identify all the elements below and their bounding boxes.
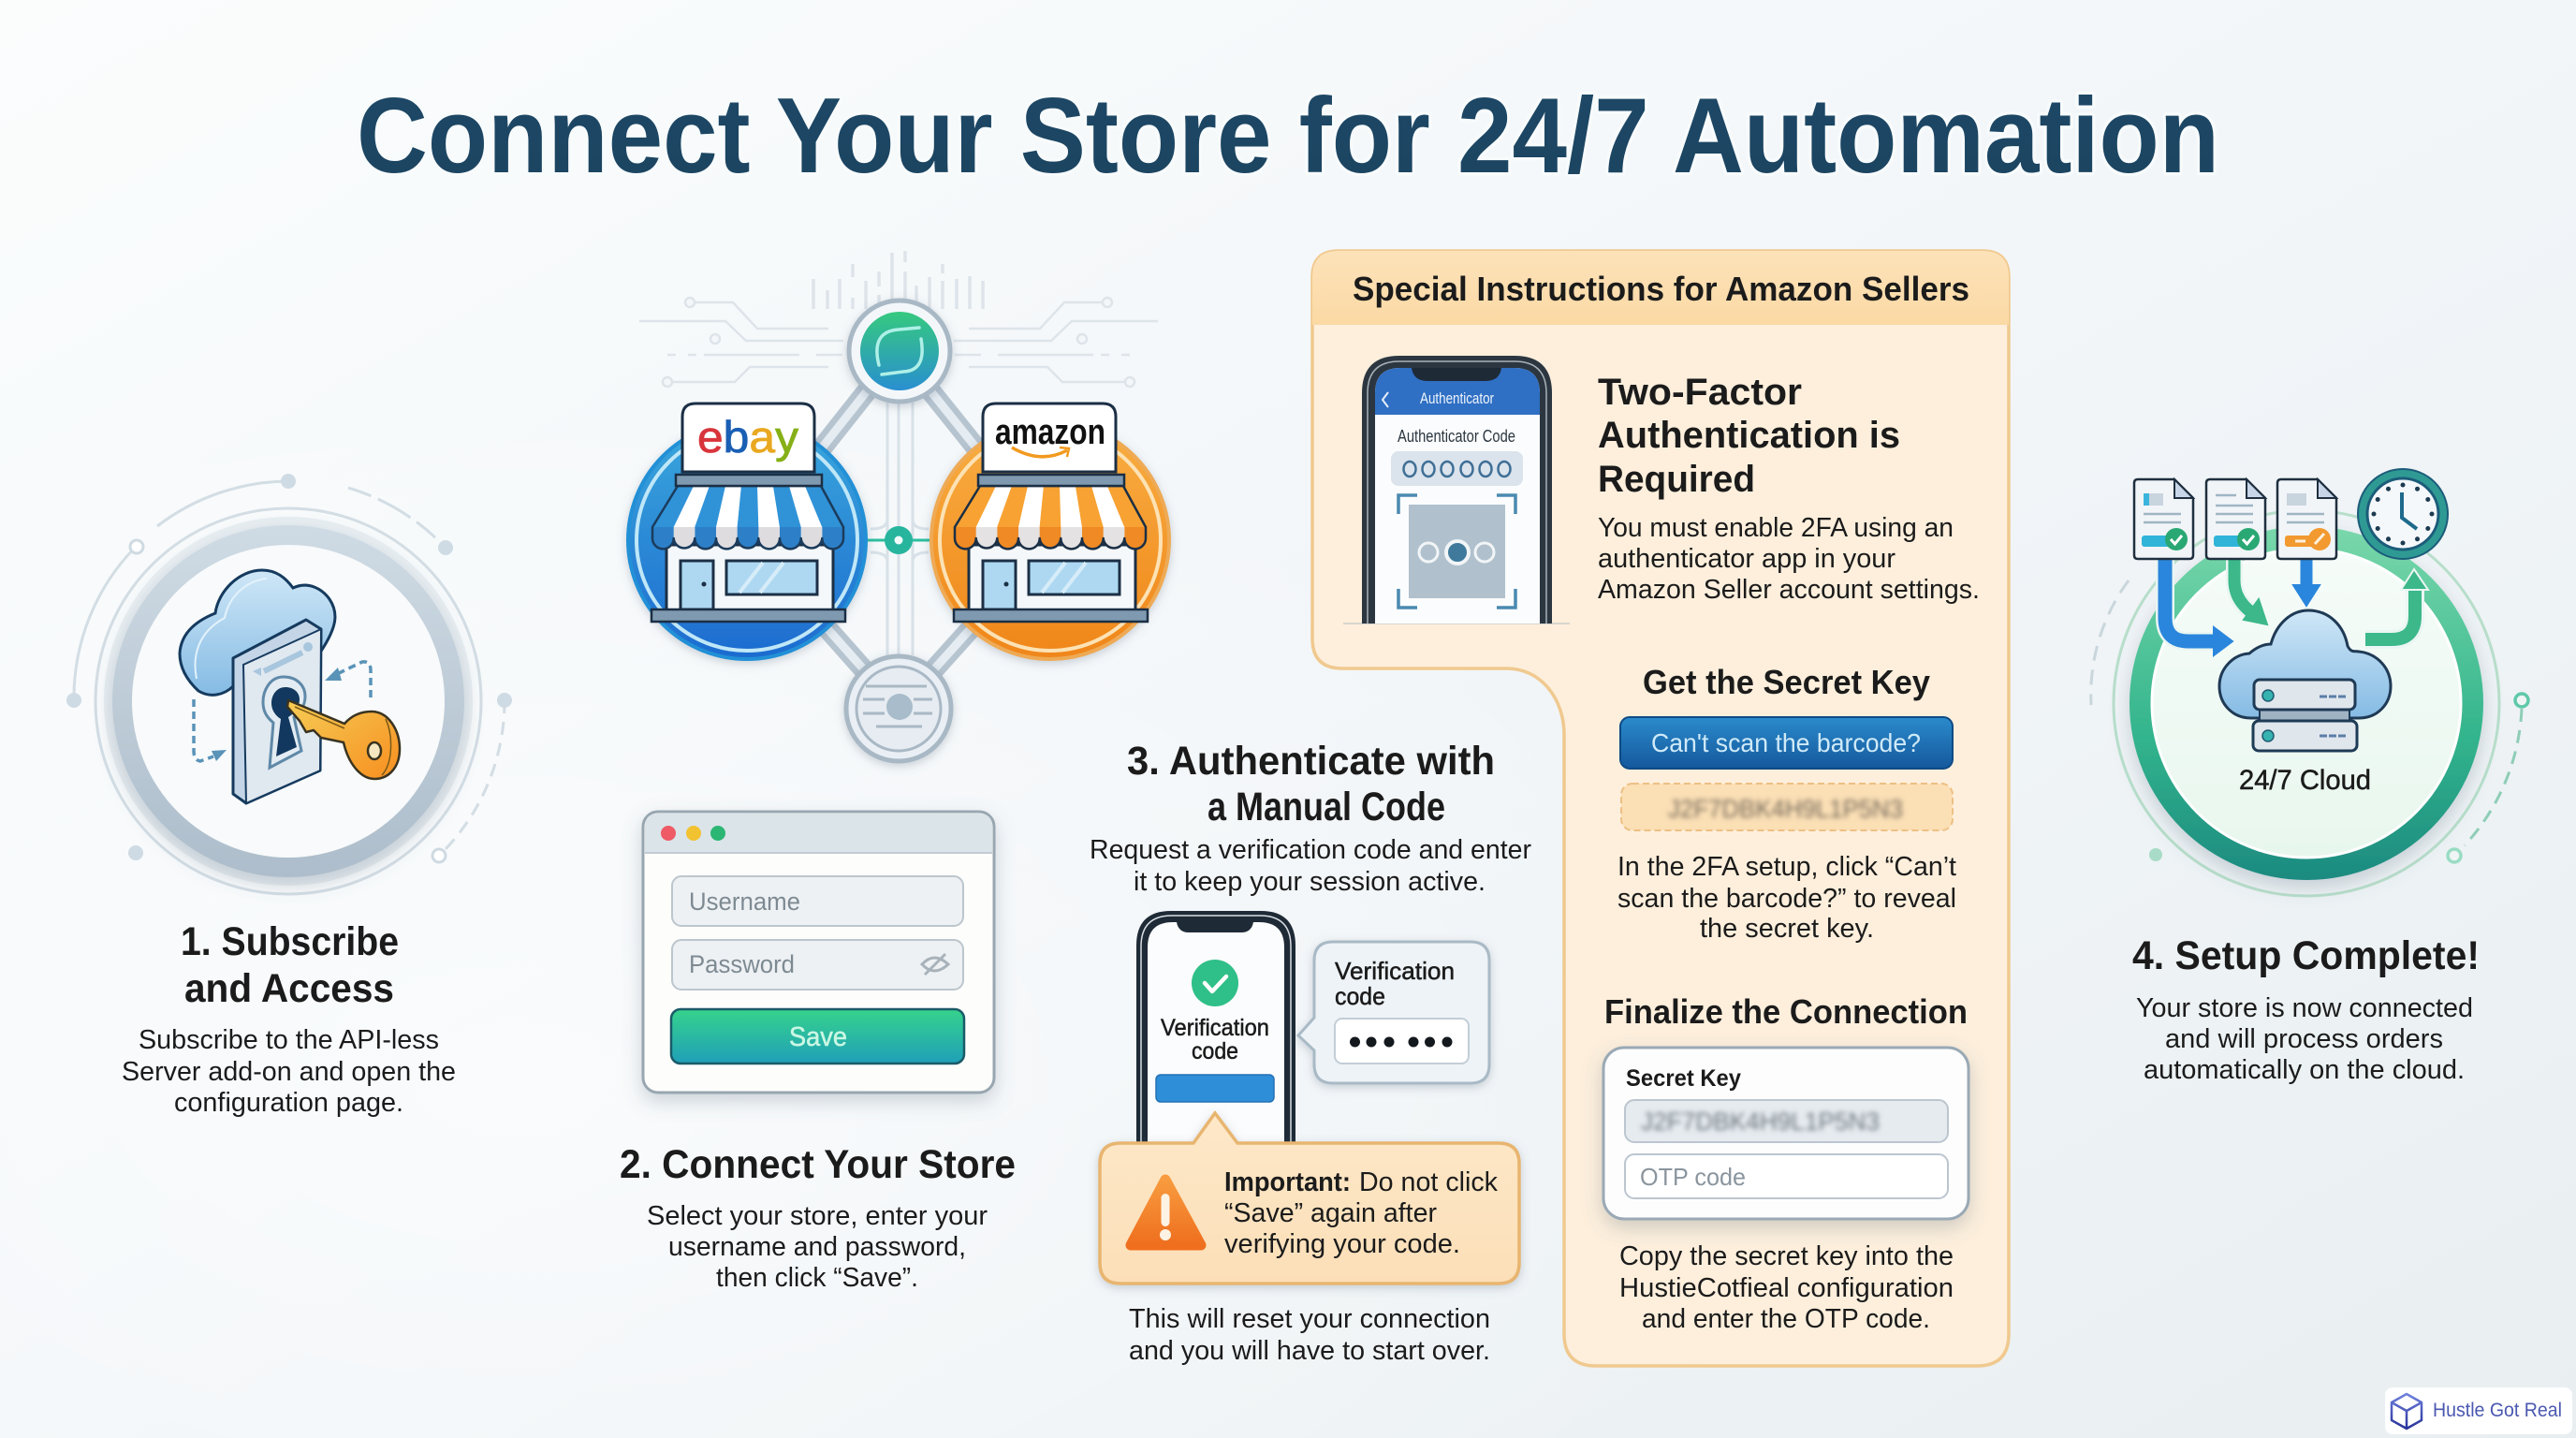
- save button: [671, 1009, 964, 1064]
- icon: circuit traces: [639, 251, 1158, 387]
- icon: blue ebay store: [628, 404, 866, 659]
- text: two-factor body: authenticator app in your: [1598, 544, 1895, 574]
- document one: [2134, 479, 2193, 559]
- arrows: flow to and from cloud: [2165, 560, 2428, 655]
- heading: finalize the connection: Finalize the Connection: [1604, 992, 1968, 1031]
- heading: step 3: 3. Authenticate with: [1127, 739, 1495, 784]
- text: step 4 body: Your store is now connected: [2136, 993, 2473, 1023]
- icon: diamond connectors: [749, 351, 1050, 709]
- icon: phone with verification code: code: [1192, 1038, 1238, 1064]
- icon: decorative orbit rings: [66, 474, 512, 894]
- callout: important warning: Important:: [1224, 1167, 1351, 1197]
- text: secret key body: scan the barcode?” to reveal: [1617, 884, 1956, 914]
- text: warning consequence: [1129, 1304, 1490, 1366]
- panel: step 4 setup complete: [2091, 469, 2528, 1085]
- heading: step 4: 4. Setup Complete!: [2132, 933, 2480, 978]
- card: secret key form: OTP code: [1640, 1163, 1746, 1191]
- icon: cloud with servers: [2219, 610, 2391, 751]
- icon: cloud with keyhole and key: [180, 570, 400, 803]
- icon: phone with verification code: Verification: [1161, 1015, 1269, 1041]
- text: step 4 body: and will process orders: [2165, 1024, 2443, 1054]
- heading: step 3: [1127, 739, 1495, 829]
- icon: sync node: [849, 301, 950, 402]
- heading: two-factor authentication: Authentication is: [1598, 415, 1900, 456]
- text: step 4 body: automatically on the cloud.: [2144, 1055, 2465, 1085]
- username field: Username: [689, 888, 800, 916]
- callout: important warning: [1100, 1113, 1519, 1284]
- text: step 2 body: Select your store, enter your: [647, 1201, 988, 1231]
- text: step 1 body: Server add-on and open the: [122, 1057, 456, 1087]
- text: step 2 body: [647, 1201, 988, 1293]
- document two: [2206, 479, 2265, 559]
- icon: authenticator phone: Authenticator: [1420, 389, 1494, 407]
- icon: authenticator phone: [1343, 356, 1570, 624]
- text: step 3 body: Request a verification code and enter: [1090, 835, 1531, 865]
- text: secret key body: [1617, 852, 1956, 944]
- card: secret key form: [1603, 1048, 1969, 1219]
- panel: step 3 authenticate with a manual code: [1090, 739, 1531, 1366]
- logo badge: hustle got real: [2385, 1387, 2572, 1434]
- icon: blue ebay store: ebay: [697, 412, 799, 462]
- icon: orange amazon store: [931, 404, 1169, 659]
- text: finalize body: Copy the secret key into the: [1619, 1241, 1954, 1271]
- icon: warning triangle: [1131, 1180, 1201, 1245]
- icon: phone with verification code: [1136, 911, 1295, 1146]
- icon: decorative orbit: [2091, 510, 2528, 896]
- card: secret key form: J2F7DBK4H9L1P5N3: [1641, 1108, 1880, 1136]
- text: warning consequence: and you will have to start over.: [1129, 1336, 1490, 1366]
- panel: step 1 subscribe and access: [66, 474, 512, 1118]
- logo badge: hustle got real: Hustle Got Real: [2433, 1400, 2562, 1421]
- card: secret key form: Secret Key: [1626, 1065, 1741, 1092]
- heading: step 1: [181, 919, 399, 1011]
- icon: server node: [846, 656, 951, 761]
- icon: grey ring disc: [104, 517, 473, 886]
- button: can't scan the barcode: [1620, 717, 1953, 769]
- text: two-factor body: [1598, 513, 1980, 605]
- panel: special instructions for amazon sellers: [1312, 251, 2009, 1366]
- text: step 2 body: then click “Save”.: [716, 1263, 918, 1293]
- text: two-factor body: Amazon Seller account settings.: [1598, 575, 1980, 605]
- heading: two-factor authentication: Two-Factor: [1598, 372, 1802, 413]
- username field: [672, 876, 963, 926]
- text: secret key body: In the 2FA setup, click “Can’t: [1617, 852, 1956, 882]
- secret key box: [1621, 784, 1953, 830]
- text: secret key body: the secret key.: [1700, 914, 1874, 944]
- heading: two-factor authentication: Required: [1598, 459, 1755, 500]
- icon: authenticator phone: Authenticator Code: [1398, 427, 1515, 446]
- callout: important warning: “Save” again after: [1224, 1198, 1437, 1228]
- icon: clock: [2358, 469, 2448, 559]
- text: step 3 body: it to keep your session active.: [1134, 867, 1486, 897]
- password field: [672, 940, 963, 990]
- text: finalize body: HustieCotfieal configuration: [1619, 1273, 1954, 1303]
- text: finalize body: and enter the OTP code.: [1642, 1304, 1930, 1334]
- text: warning consequence: This will reset your connection: [1129, 1304, 1490, 1334]
- text: step 3 body: [1090, 835, 1531, 897]
- heading: step 3: a Manual Code: [1208, 785, 1445, 829]
- callout: verification code bubble: code: [1335, 982, 1385, 1010]
- icon: documents: [2134, 479, 2336, 559]
- heading: step 1: 1. Subscribe: [181, 919, 399, 964]
- icon: cube: [2392, 1394, 2422, 1429]
- panel header: Special Instructions for Amazon Sellers: [1353, 270, 1969, 308]
- icon: orange amazon store: amazon: [995, 413, 1105, 452]
- panel: step 2 connect your store: [620, 251, 1169, 1293]
- document three: [2277, 479, 2336, 559]
- label: 24/7 cloud: 24/7 Cloud: [2239, 765, 2371, 796]
- heading: two-factor authentication: [1598, 372, 1900, 500]
- icon: center node: [885, 526, 913, 554]
- title: Connect Your Store for 24/7 Automation: [357, 77, 2219, 196]
- callout: important warning: verifying your code.: [1224, 1229, 1460, 1259]
- text: step 1 body: configuration page.: [174, 1088, 403, 1118]
- text: step 1 body: Subscribe to the API-less: [139, 1025, 439, 1055]
- callout: verification code bubble: Verification: [1335, 957, 1455, 985]
- heading: get the secret key: Get the Secret Key: [1643, 663, 1930, 701]
- text: finalize body: [1619, 1241, 1954, 1334]
- secret key box: J2F7DBK4H9L1P5N3: [1668, 795, 1903, 823]
- text: step 2 body: username and password,: [668, 1232, 966, 1262]
- text: step 1 body: [122, 1025, 456, 1118]
- heading: step 1: and Access: [184, 966, 394, 1011]
- button: can't scan the barcode: Can't scan the barcode?: [1651, 728, 1921, 757]
- panel header: [1312, 251, 2009, 325]
- password field: Password: [689, 950, 795, 978]
- callout: verification code bubble: [1298, 942, 1489, 1083]
- icon: green ring: [2130, 526, 2483, 880]
- text: two-factor body: You must enable 2FA using an: [1598, 513, 1954, 543]
- text: step 4 body: [2136, 993, 2473, 1085]
- login form window: [643, 812, 994, 1093]
- heading: step 2: 2. Connect Your Store: [620, 1142, 1016, 1187]
- save button: Save: [789, 1022, 847, 1052]
- callout: important warning: Do not click: [1359, 1167, 1498, 1197]
